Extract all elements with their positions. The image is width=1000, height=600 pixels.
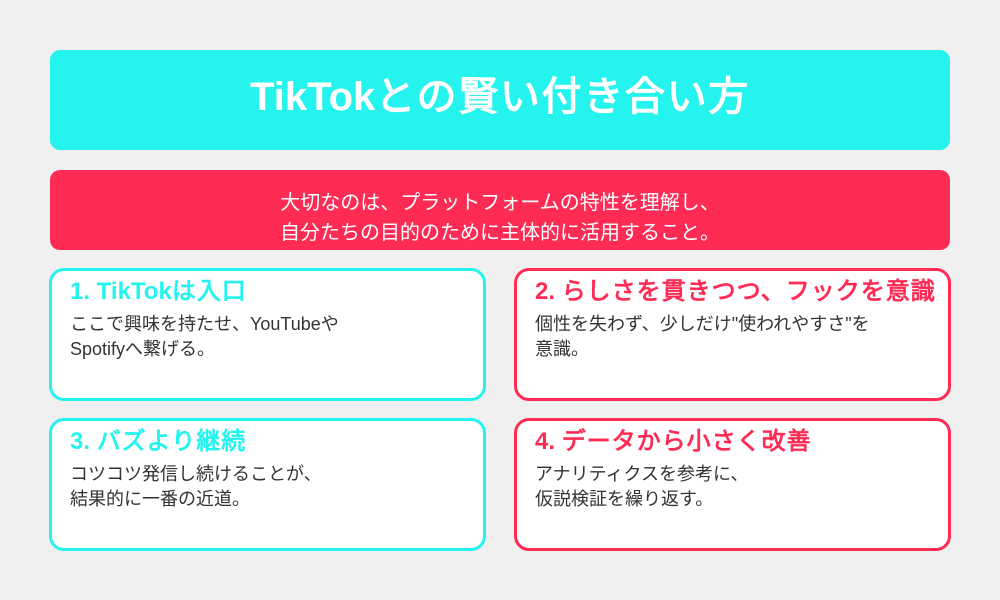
heading: card 3: 3. バズより継続 [70,428,246,455]
summary banner: 自分たちの目的のために主体的に活用すること。 [280,222,720,244]
text: card 1 [70,314,339,359]
text: card 4: アナリティクスを参考に、 [535,464,748,484]
text: card 3: コツコツ発信し続けることが、 [70,464,322,484]
title banner [50,50,950,150]
summary banner [50,170,950,250]
text: card 3: 結果的に一番の近道。 [70,489,250,509]
text: card 1: ここで興味を持たせ、YouTubeや [70,314,339,334]
panel: card 1 [49,268,486,401]
heading: card 4: 4. データから小さく改善 [535,428,812,455]
heading: card 2: 2. らしさを貫きつつ、フックを意識 [535,278,936,305]
text: card 1: Spotifyへ繋げる。 [70,339,215,359]
text: card 2: 個性を失わず、少しだけ"使われやすさ"を [535,314,870,334]
panel: card 4 [514,418,951,551]
text: card 3 [70,464,322,509]
panel: card 3 [49,418,486,551]
text: card 2: 意識。 [535,339,589,359]
text: card 4: 仮説検証を繰り返す。 [535,489,713,509]
heading: card 1: 1. TikTokは入口 [70,278,247,305]
text: card 4 [535,464,748,509]
panel: card 2 [514,268,951,401]
text: card 2 [535,314,870,359]
summary banner: 大切なのは、プラットフォームの特性を理解し、 [280,192,720,214]
title banner: TikTokとの賢い付き合い方 [250,75,750,119]
